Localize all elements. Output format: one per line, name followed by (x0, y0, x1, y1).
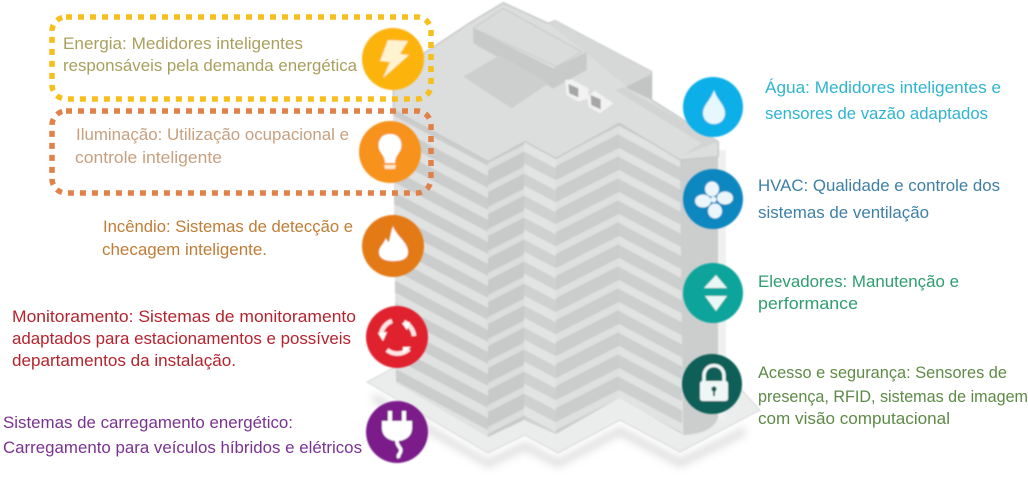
text: incêndio: checagem inteligente. (102, 241, 267, 259)
vent left opening (568, 84, 578, 97)
penthouse box side (473, 28, 587, 88)
rear corner shade (625, 74, 652, 100)
right parapet (615, 87, 718, 155)
text: energia: responsáveis pela demanda energética (63, 57, 358, 75)
text: elevadores: Elevadores: Manutenção e (758, 273, 959, 291)
icon: acesso padlock (682, 354, 742, 414)
callout frame: iluminação (52, 111, 431, 193)
text: hvac (758, 177, 1000, 222)
building ground shadow (373, 392, 745, 468)
roof deck (393, 3, 718, 162)
plinth (367, 366, 760, 453)
face D (556, 123, 619, 434)
text: incêndio (102, 218, 353, 259)
text: acesso e segurança (758, 364, 1028, 428)
text: acesso e segurança: presença, RFID, sistemas de imagem (758, 388, 1028, 406)
icon: carregamento plug (366, 401, 428, 463)
vent left (565, 79, 588, 102)
right side shadow (718, 150, 726, 420)
text: carregamento: Carregamento para veículos híbridos e elétricos (3, 439, 362, 457)
text: água: sensores de vazão adaptados (765, 105, 988, 123)
illustration: smart building (367, 3, 760, 468)
text: monitoramento: adaptados para estacionamentos e possíveis (12, 330, 351, 348)
text: elevadores: performance (758, 295, 858, 313)
roof (393, 3, 718, 162)
text: iluminação: controle inteligente (75, 149, 222, 167)
text: hvac: HVAC: Qualidade e controle dos (758, 177, 1000, 195)
roof pad (463, 55, 548, 108)
text: carregamento (3, 414, 362, 457)
text: monitoramento: departamentos da instalação. (12, 352, 236, 370)
text: carregamento: Sistemas de carregamento energético: (3, 414, 293, 432)
icon: hvac fan (683, 169, 743, 229)
callout frame: energia (52, 17, 431, 99)
text: elevadores (758, 273, 959, 313)
text: acesso e segurança: com visão computacional (758, 410, 950, 428)
text: água (765, 78, 1001, 123)
rounded end of building (680, 142, 718, 435)
icon: energia lightning (362, 28, 424, 90)
text: água: Água: Medidores inteligentes e (765, 78, 1001, 97)
penthouse box top (473, 8, 582, 67)
text: energia: Energia: Medidores inteligentes (63, 35, 303, 53)
text: monitoramento: Monitoramento: Sistemas de monitoramento (12, 308, 356, 326)
text: acesso e segurança: Acesso e segurança: Sensores de (758, 364, 1007, 382)
icon: iluminação bulb (359, 121, 421, 183)
text: monitoramento (12, 308, 356, 370)
text: incêndio: Incêndio: Sistemas de detecção e (103, 218, 353, 236)
icon: monitoramento arrows (366, 306, 428, 368)
vent right (587, 91, 613, 113)
inner face C (524, 142, 556, 434)
text: energia (63, 35, 358, 75)
icon: elevadores arrows (683, 263, 743, 323)
text: iluminação (75, 126, 349, 167)
face E (619, 123, 682, 434)
icon: água drop (683, 77, 743, 137)
icon: incêndio flame (362, 215, 424, 277)
left face (393, 110, 488, 437)
vent right opening (591, 95, 601, 109)
rear wall (548, 21, 652, 100)
inner face B (488, 142, 524, 437)
text: hvac: sistemas de ventilação (758, 204, 929, 222)
text: iluminação: Iluminação: Utilização ocupacional e (76, 126, 349, 144)
